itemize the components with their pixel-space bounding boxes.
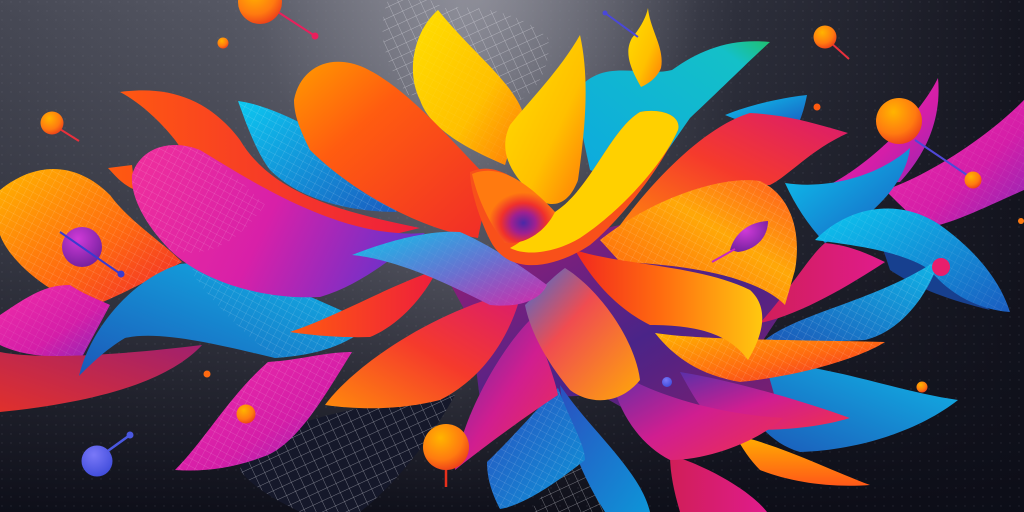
orb: small blue center xyxy=(662,377,672,387)
petal: right orange mesh xyxy=(600,180,797,305)
orb: pink right xyxy=(932,258,950,276)
wire mesh: bottom back xyxy=(240,395,625,512)
petal: low right magenta xyxy=(680,372,850,430)
petal: upper left red orange xyxy=(108,90,420,245)
petal: lower left magenta mesh xyxy=(175,352,352,470)
orb: small right lower xyxy=(916,382,928,392)
petal: top blue wave xyxy=(574,41,770,190)
orb: top blue stick xyxy=(602,10,638,37)
petal: left magenta mesh xyxy=(0,285,110,357)
petal: big blue mesh left xyxy=(79,263,372,376)
petal: lower right orange mesh xyxy=(655,333,885,382)
orb: purple on left petal xyxy=(60,227,124,278)
filler: dark magenta centre xyxy=(440,225,790,440)
orb: small orange lower left xyxy=(236,404,256,424)
orb: tiny right xyxy=(814,104,820,110)
petal: left orange mesh xyxy=(0,169,182,307)
orb: large orange bottom xyxy=(423,424,469,487)
petal: golden center right xyxy=(575,250,762,360)
petal: right blue mesh xyxy=(765,258,940,342)
petal: big orange top xyxy=(294,62,490,238)
petal: cyan mesh upper left xyxy=(238,101,397,212)
petal: right magenta xyxy=(760,243,885,323)
petal: low right blue xyxy=(745,362,958,452)
petal: center yellow top xyxy=(505,35,586,204)
petal: lower magenta xyxy=(610,368,783,460)
orb: small top left xyxy=(218,38,228,48)
petal: center lower orange red xyxy=(325,290,522,408)
petal: top orange flame xyxy=(628,8,662,87)
orb: magenta bud on right petal xyxy=(712,221,768,262)
orb: top right orange xyxy=(814,26,849,59)
petals: far right magenta xyxy=(825,78,1024,228)
orb: top center orange with stick xyxy=(238,0,318,40)
petal: center swirl xyxy=(470,111,678,265)
orb: large right orange with stick xyxy=(876,98,982,188)
petal: center cyan xyxy=(352,232,547,306)
petal: bottom blue mesh xyxy=(487,388,585,509)
orb: tiny left xyxy=(204,370,210,378)
petal: small cyan top right xyxy=(725,95,807,125)
petal: top yellow mesh xyxy=(413,10,522,165)
petal: center lower red xyxy=(290,270,437,337)
petal: bottom magenta xyxy=(670,455,767,512)
petal: left red xyxy=(0,345,202,412)
petal: bottom blue xyxy=(560,385,650,512)
petal: center magenta lower xyxy=(455,320,558,470)
wire mesh: top back xyxy=(383,0,549,100)
petal: big magenta mesh left xyxy=(132,145,425,297)
petal: bottom right orange xyxy=(735,435,870,486)
petal: center lower blue orange xyxy=(525,268,640,400)
petal: right cyan upper xyxy=(785,148,910,243)
petal: right red upper xyxy=(615,113,848,232)
orb: left orange with stick xyxy=(40,112,79,141)
orb: violet with stick xyxy=(82,432,134,476)
petal: right blue large xyxy=(815,209,1010,312)
orb: tiny far right xyxy=(1018,218,1024,224)
